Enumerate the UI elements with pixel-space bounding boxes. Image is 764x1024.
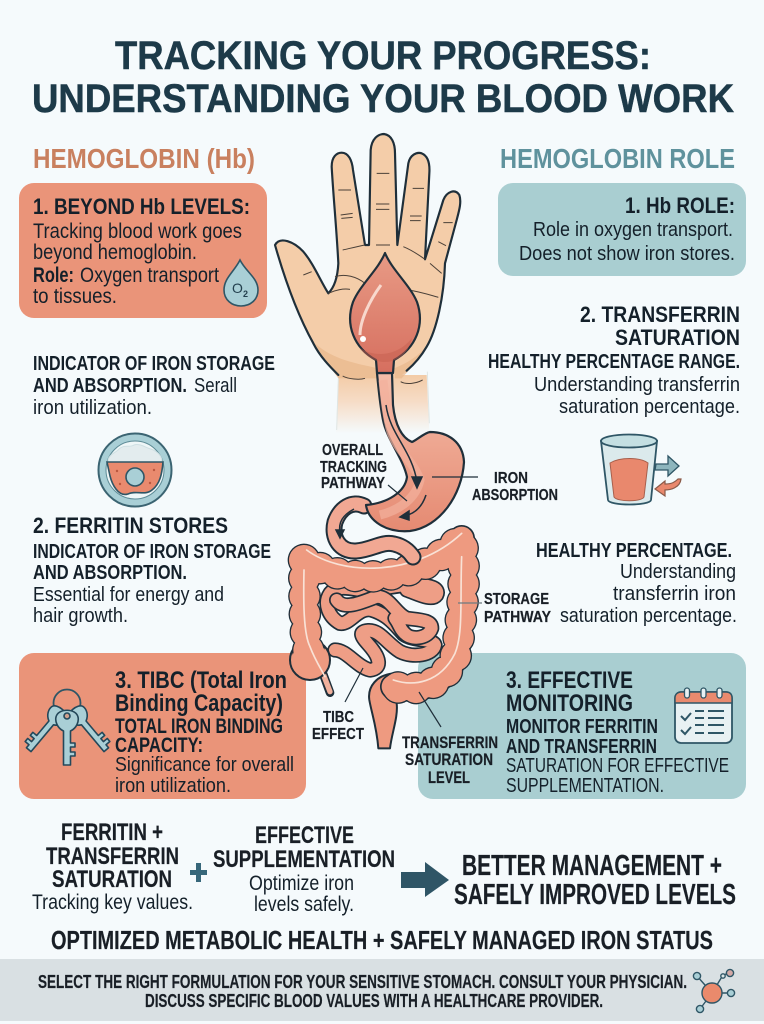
text block: transferrin saturation [488,302,740,418]
panel: effective monitoring: MONITORING [506,690,633,717]
label: TIBC effect: EFFECT [312,726,364,743]
text block: transferrin saturation: saturation percentage. [559,396,740,418]
left heading: HEMOGLOBIN (Hb) [33,143,255,174]
illustration: blood drop [350,253,420,373]
text block: effective supplementation [213,822,395,916]
panel: beyond Hb levels: to tissues. [33,285,117,308]
text block: ferritin stores: INDICATOR OF IRON STORAGE [33,541,271,563]
text block: effective supplementation: SUPPLEMENTATION [213,846,395,873]
panel: effective monitoring: MONITOR FERRITIN [506,716,658,738]
panel: beyond Hb levels: Oxygen transport [80,264,219,287]
text block: ferritin stores: hair growth. [33,605,128,627]
text block: transferrin saturation: Understanding transferrin [534,374,740,396]
panel: Hb role: Role in oxygen transport. [533,219,733,241]
text block: ferritin stores: 2. FERRITIN STORES [33,513,228,538]
text block: indicator intro: iron utilization. [33,397,152,419]
label: storage pathway [458,591,551,626]
footer band [0,959,764,1021]
text block: indicator intro [33,353,275,419]
title: TRACKING YOUR PROGRESS: [115,34,651,78]
label: overall tracking pathway [320,442,407,501]
arrow: to outcome [401,862,449,897]
illustration: duodenum [334,504,413,557]
panel: beyond Hb levels: beyond hemoglobin. [33,241,197,264]
text block: better management [454,850,736,911]
panel: beyond Hb levels: Tracking blood work goes [33,220,242,243]
label: iron absorption: IRON [494,470,528,487]
illustration: large intestine [290,533,464,748]
icon: oxygen drop: O [232,280,243,296]
label: overall tracking pathway: OVERALL [322,442,383,459]
footer band: DISCUSS SPECIFIC BLOOD VALUES WITH A HEALTHCARE PROVIDER. [145,991,603,1011]
icon: calendar checklist [675,688,732,743]
text block: ferritin stores: AND ABSORPTION. [33,562,187,584]
panel: TIBC: Binding Capacity) [115,690,283,717]
icon: plus sign [190,863,207,882]
panel: beyond Hb levels: 1. BEYOND Hb LEVELS: [33,194,250,219]
panel: TIBC: CAPACITY: [115,734,203,757]
label: iron absorption: ABSORPTION [472,487,558,504]
panel: effective monitoring: 3. EFFECTIVE [506,667,633,694]
label: TIBC effect [312,668,364,743]
panel: beyond Hb levels: Role: [33,264,74,287]
icon: oxygen drop [224,260,258,306]
label: storage pathway: PATHWAY [484,609,551,626]
illustration: stomach and esophagus [336,373,464,538]
text block: indicator intro: Serall [194,375,237,397]
label: transferrin saturation level: SATURATION [405,750,493,769]
panel: Hb role: Does not show iron stores. [519,243,735,265]
illustration: duodenum fill [334,504,413,557]
label: transferrin saturation level: TRANSFERRIN [402,733,498,752]
label: transferrin saturation level [402,692,498,787]
label: overall tracking pathway: TRACKING [320,459,387,476]
icon: keys [21,690,114,765]
text block: healthy percentage: saturation percentage. [560,605,737,627]
text block: indicator intro: INDICATOR OF IRON STORAGE [33,353,275,375]
illustration: small intestine [327,585,437,670]
title [32,34,734,121]
label: storage pathway: STORAGE [484,591,549,608]
icon: ferritin store [98,434,172,506]
text block: healthy percentage: transferrin iron [613,583,736,605]
panel: TIBC: iron utilization. [115,775,231,797]
text block: effective supplementation: levels safely. [254,893,354,916]
text block: effective supplementation: Optimize iron [249,872,354,895]
panel: TIBC [19,653,306,799]
icon: glass with arrows [601,434,681,504]
icon: oxygen drop: 2 [243,289,248,299]
text block: ferritin plus transferrin: Tracking key values. [32,891,193,914]
panel: effective monitoring [418,653,746,799]
icon: molecule [693,969,735,1013]
panel: Hb role [498,183,746,276]
illustration: hand [275,134,460,433]
panel: TIBC: TOTAL IRON BINDING [115,715,283,738]
text block: ferritin plus transferrin [32,819,193,914]
label: TIBC effect: TIBC [323,709,354,726]
text block: transferrin saturation: 2. TRANSFERRIN [580,302,740,327]
label: iron absorption [432,470,558,504]
text block: effective supplementation: EFFECTIVE [255,822,354,849]
panel: effective monitoring: SUPPLEMENTATION. [506,775,664,797]
text block: ferritin stores: Essential for energy and [33,584,224,606]
label: overall tracking pathway: PATHWAY [321,475,385,492]
panel: TIBC: Significance for overall [115,754,294,776]
text block: ferritin plus transferrin: SATURATION [52,866,172,893]
text block: ferritin plus transferrin: FERRITIN + [61,819,163,846]
panel: beyond Hb levels [19,183,267,318]
text block: transferrin saturation: SATURATION [615,325,740,350]
panel: Hb role: 1. Hb ROLE: [625,193,735,218]
text block: healthy percentage: Understanding [620,561,736,583]
text block: healthy percentage [536,540,737,627]
text block: indicator intro: AND ABSORPTION. [33,375,187,397]
text block: ferritin plus transferrin: TRANSFERRIN [46,843,179,870]
text block: ferritin stores [33,513,271,627]
label: transferrin saturation level: LEVEL [428,768,470,787]
panel: TIBC: 3. TIBC (Total Iron [115,667,287,694]
panel: effective monitoring: AND TRANSFERRIN [506,736,657,758]
